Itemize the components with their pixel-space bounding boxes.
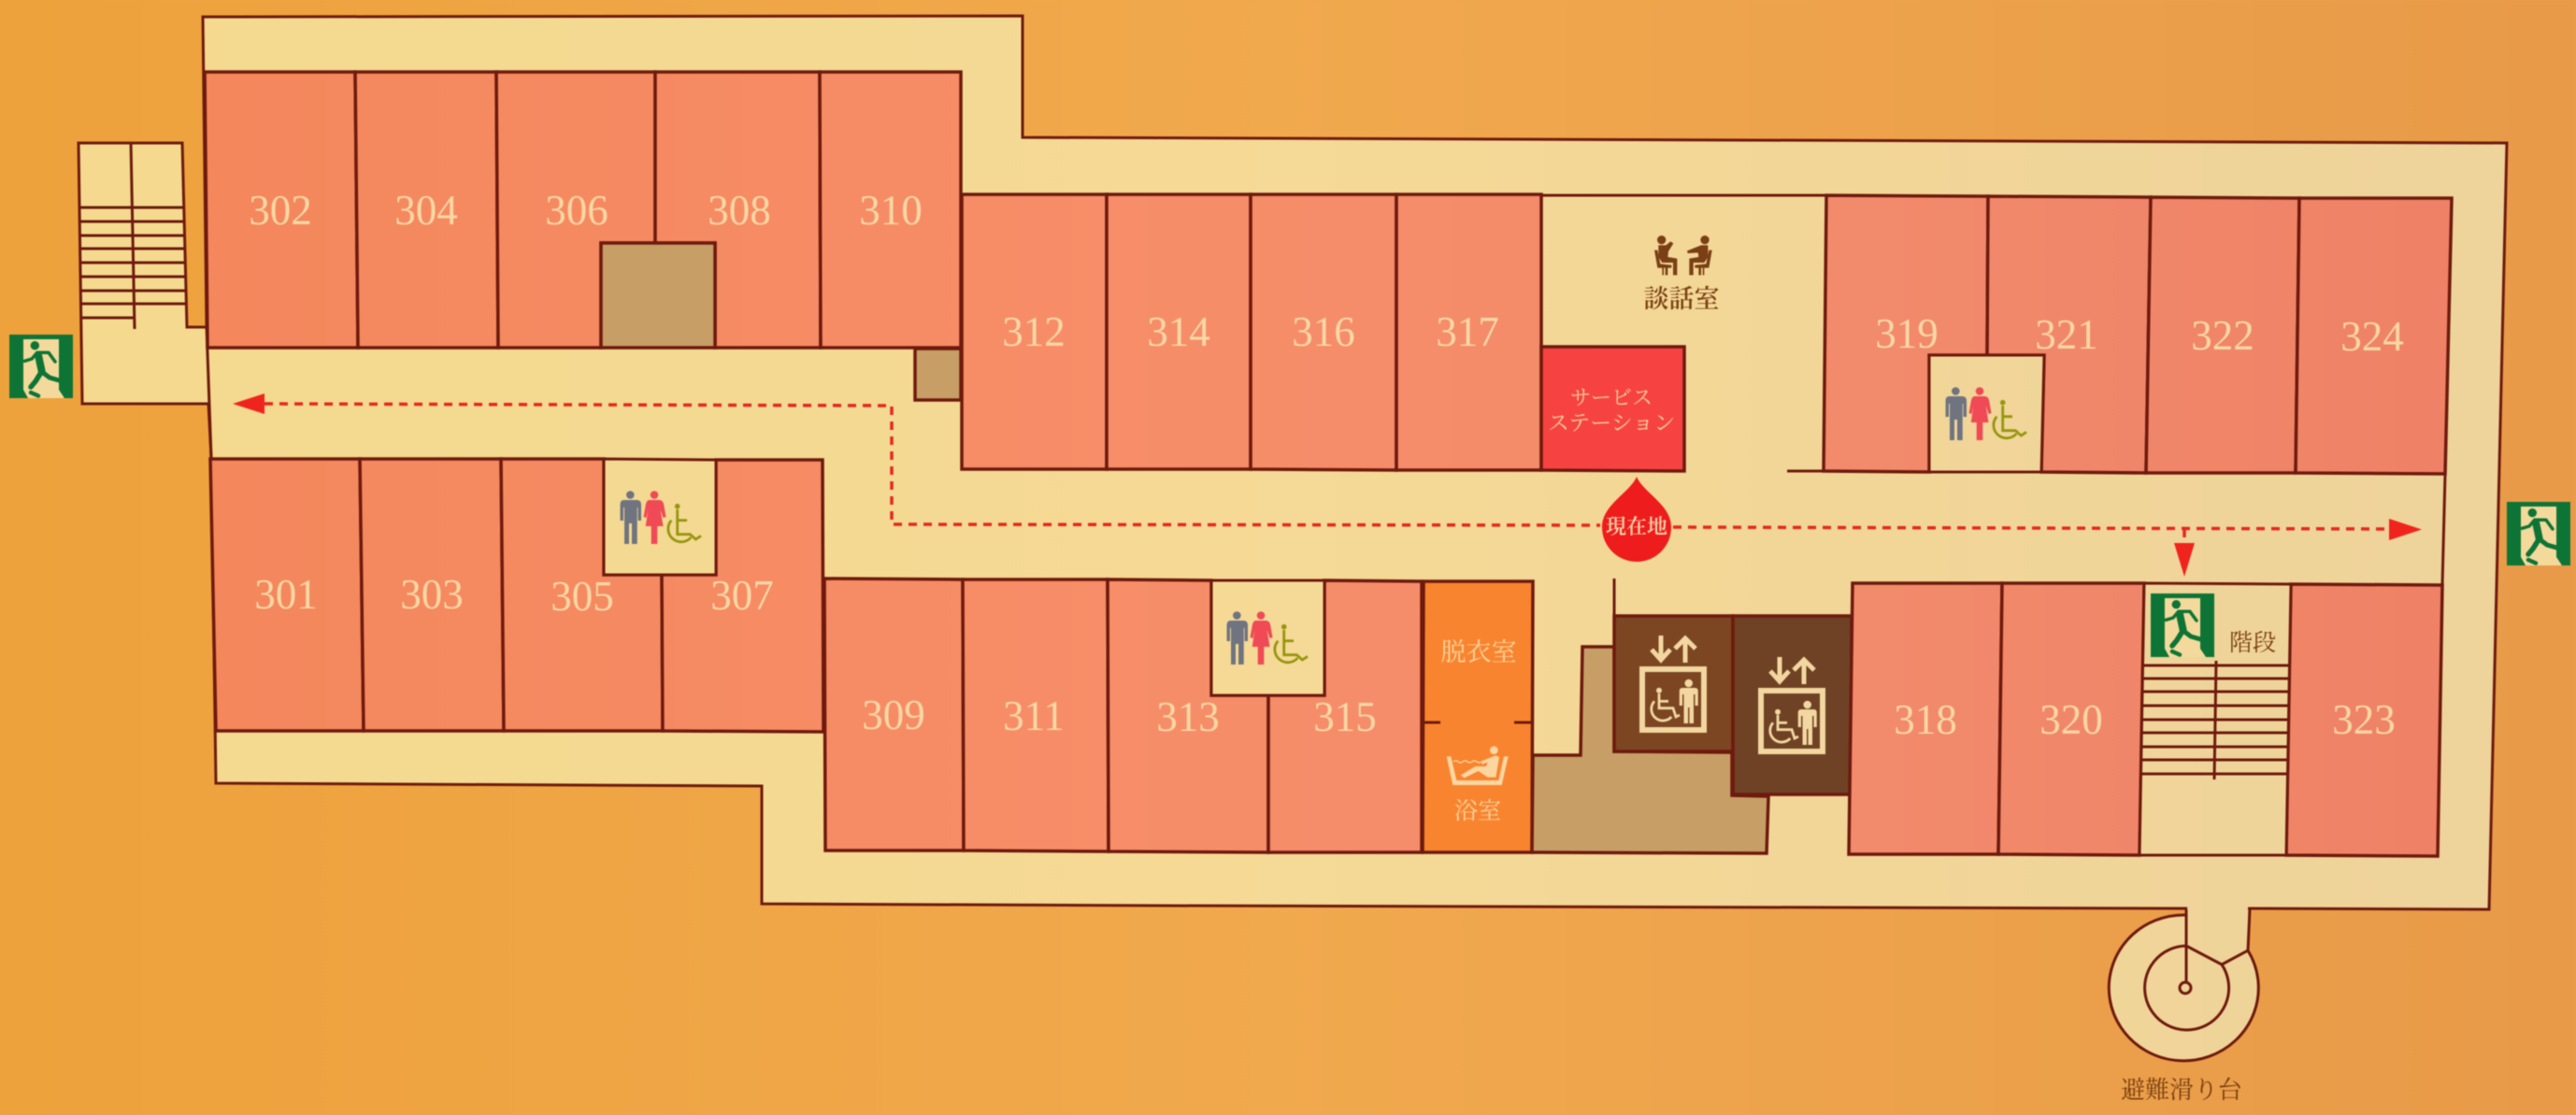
icon: toilet people and wheelchair [1946, 387, 2026, 440]
room 312 [962, 194, 1107, 469]
icon: toilet people and wheelchair [1226, 611, 1308, 665]
corridor west wall [207, 327, 211, 458]
current location marker [1602, 477, 1671, 562]
room 304: 304 [394, 187, 458, 234]
room 306 [496, 72, 655, 348]
service station: ステーション [1548, 411, 1675, 435]
room 319 [1824, 195, 1988, 472]
room 319: 319 [1875, 310, 1939, 357]
service station [1541, 347, 1684, 471]
room 318: 318 [1894, 696, 1957, 743]
room 323 [2286, 584, 2442, 856]
icon: exit sign west [9, 335, 73, 398]
current location marker: 現在地 [1606, 515, 1667, 538]
slide label: 避難滑り台 [2121, 1077, 2242, 1104]
room 322 [2146, 197, 2299, 473]
room 323: 323 [2332, 696, 2396, 743]
arrow: to stairs [2174, 543, 2195, 577]
room 314: 314 [1147, 308, 1210, 355]
room 309 [824, 579, 964, 851]
room 305 [501, 459, 663, 731]
storage area beside lifts [1532, 647, 1768, 853]
shaft above corridor [601, 243, 715, 348]
evacuation route [233, 393, 2422, 577]
room 311 [963, 579, 1109, 851]
room 322: 322 [2191, 312, 2254, 359]
arrow: west [233, 393, 265, 414]
toilets west [604, 459, 716, 575]
room 308 [655, 72, 821, 348]
room 315: 315 [1313, 693, 1377, 740]
stairs label: 階段 [2229, 630, 2276, 656]
room 309: 309 [862, 692, 925, 738]
lounge label with icon [1643, 236, 1720, 313]
evacuation slide [2109, 903, 2258, 1061]
corridor wall stubs [1787, 471, 2445, 584]
icon: lift [1761, 691, 1823, 751]
room 313 [1108, 579, 1268, 852]
room 317 [1396, 194, 1541, 470]
central staircase [2140, 583, 2291, 855]
icon: two people talking [1654, 236, 1712, 275]
room 306: 306 [545, 187, 608, 234]
bath and changing room: 浴室 [1454, 798, 1501, 824]
room 316 [1251, 194, 1396, 470]
room 305: 305 [551, 573, 614, 620]
left emergency stairs [80, 143, 186, 329]
room 311: 311 [1003, 693, 1065, 739]
service station: サービス [1570, 386, 1653, 409]
room 318 [1849, 583, 2002, 854]
lift 2 [1733, 616, 1852, 794]
room 307: 307 [710, 572, 774, 619]
room 310: 310 [859, 187, 923, 234]
room 303: 303 [400, 571, 464, 618]
small shaft [915, 349, 961, 400]
room 320 [1998, 583, 2144, 855]
icon: exit sign [2151, 593, 2214, 657]
arrow: east [2389, 519, 2422, 540]
room 314 [1107, 194, 1251, 469]
toilets north-east [1929, 355, 2044, 472]
icon: up down arrows [1770, 657, 1814, 684]
room 321 [1987, 196, 2151, 473]
room 307 [662, 460, 823, 732]
room 302: 302 [249, 187, 312, 234]
room 302 [205, 72, 358, 348]
room 304 [355, 72, 498, 348]
toilets south [1211, 580, 1324, 695]
floor plan: corridors and outer wall [79, 16, 2507, 909]
bath and changing room: 脱衣室 [1441, 638, 1516, 666]
lounge text: 談話室 [1643, 285, 1720, 313]
room 301: 301 [254, 571, 318, 618]
room 313: 313 [1156, 693, 1220, 740]
room 303 [360, 459, 504, 731]
lift 1 [1614, 616, 1733, 751]
icon: up down arrows [1652, 636, 1696, 663]
room 315 [1268, 580, 1422, 852]
icon: toilet people and wheelchair [621, 491, 701, 544]
room 310 [820, 72, 961, 348]
icon: exit sign east [2507, 502, 2570, 565]
room 308: 308 [708, 187, 771, 234]
room 316: 316 [1292, 308, 1355, 355]
lounge top wall [1541, 194, 1826, 196]
bath and changing room [1423, 581, 1533, 852]
icon: bathtub [1447, 746, 1509, 785]
wall stub above lift [1613, 579, 1615, 616]
room 321: 321 [2035, 311, 2098, 358]
room 324: 324 [2340, 313, 2404, 360]
room 320: 320 [2039, 696, 2103, 743]
room 312: 312 [1002, 308, 1066, 355]
room 301 [210, 459, 364, 731]
room 324 [2296, 198, 2452, 474]
room 317: 317 [1436, 308, 1499, 355]
icon: lift [1642, 669, 1704, 730]
